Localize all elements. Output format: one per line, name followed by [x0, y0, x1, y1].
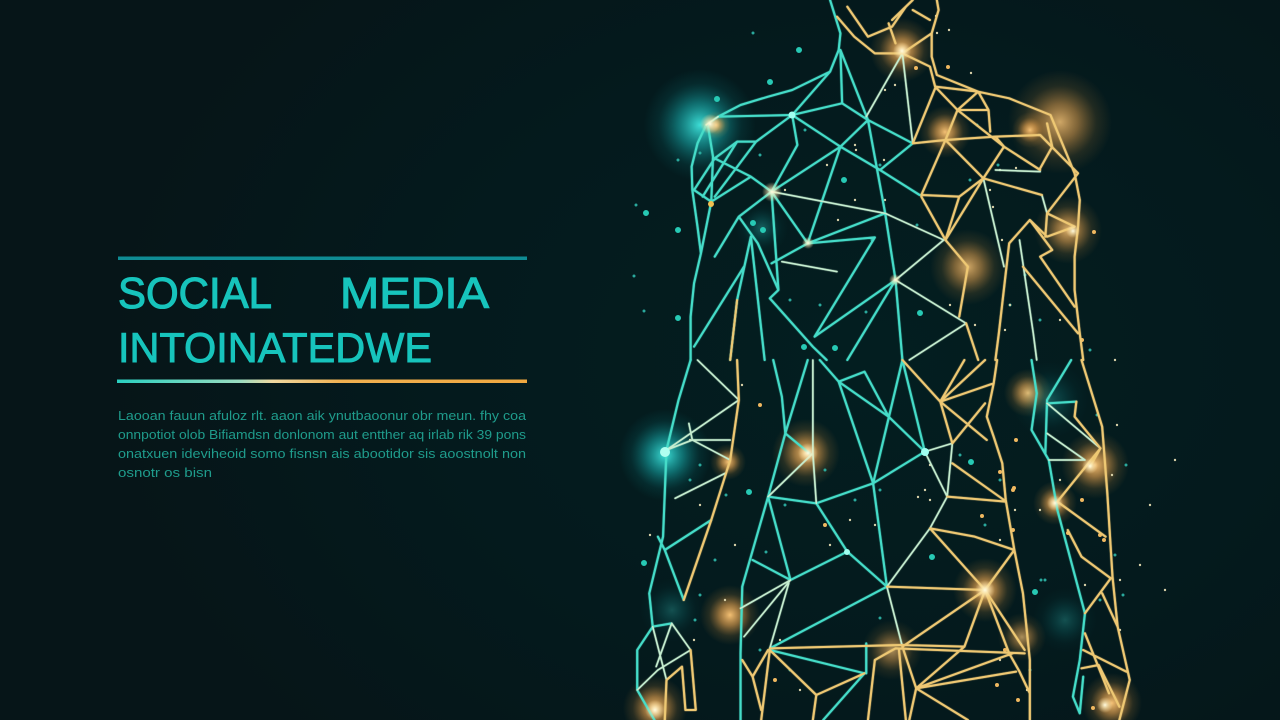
title line one: SOCIAL: [118, 269, 272, 318]
teal lines, upper body: [691, 0, 920, 360]
title line one: [118, 269, 490, 318]
body paragraph: Laooan fauun afuloz rlt. aaon aik ynutbaoonur obr meun. fhy coa: [118, 409, 526, 423]
body paragraph: [118, 409, 526, 480]
body paragraph: onnpotiot olob Bifiamdsn donlonom aut entther aq irlab rik 39 pons: [118, 428, 526, 442]
gold lines, upper body: [730, 0, 1083, 360]
title line one: MEDIA: [340, 269, 490, 318]
teal lines, lower body: [637, 360, 1085, 720]
title line two: INTOINATEDWE: [118, 324, 432, 371]
body wireframe: lower half: [637, 360, 1130, 720]
pale lines, upper body: [706, 53, 1047, 360]
pale lines, lower body: [637, 360, 1100, 690]
body wireframe: upper half: [691, 0, 1083, 360]
gold lines, lower body: [665, 360, 1130, 720]
top rule: [118, 256, 527, 260]
body paragraph: onatxuen ideviheoid somo fisnsn ais abootidor sis aoostnolt non: [118, 447, 526, 461]
particles: [634, 16, 1175, 708]
bright node highlights: [645, 42, 1113, 720]
text panel: title block and body copy: [117, 256, 527, 480]
glow spots behind the body: [619, 18, 1142, 720]
bottom gradient rule: [117, 380, 527, 383]
body paragraph: osnotr os bisn: [118, 466, 212, 480]
